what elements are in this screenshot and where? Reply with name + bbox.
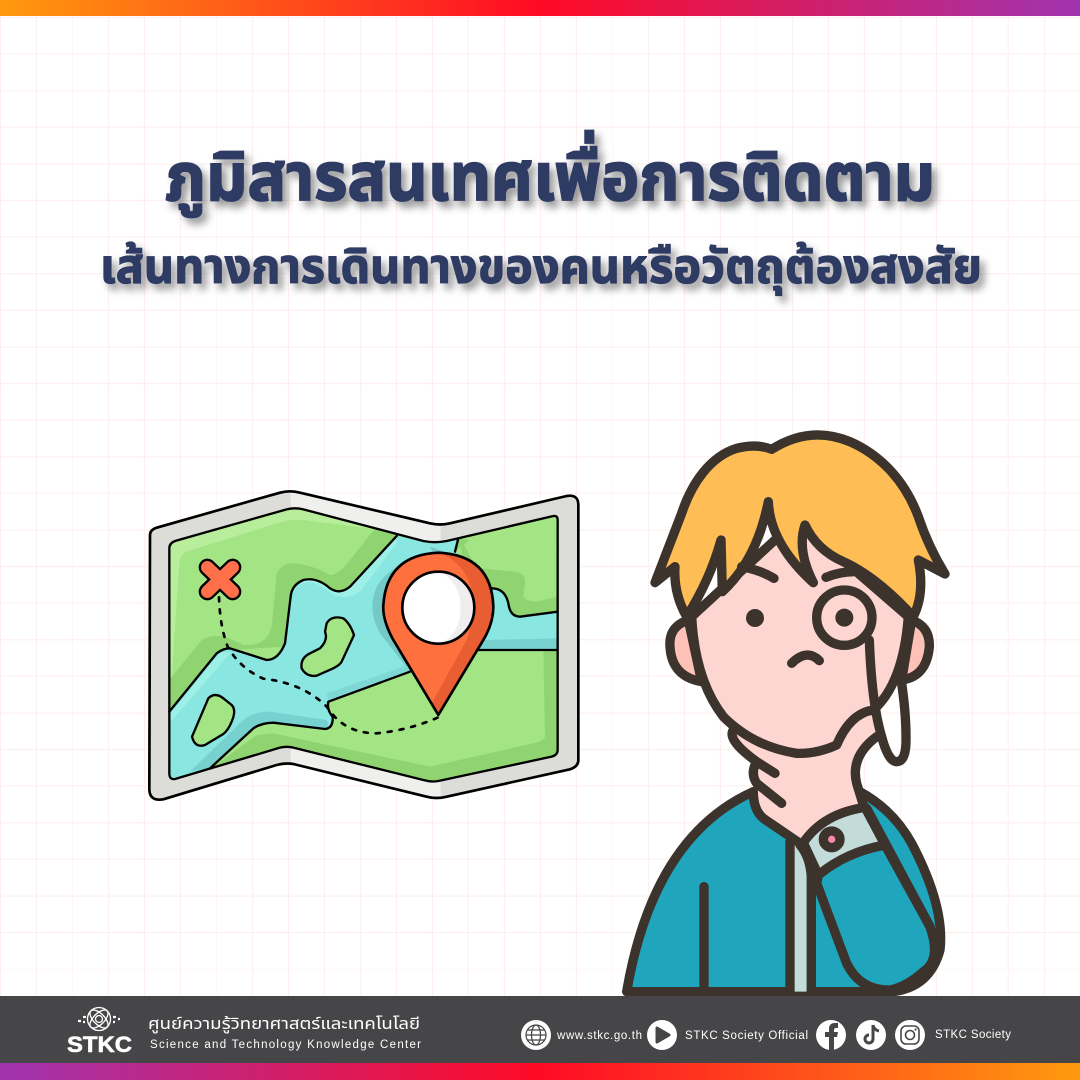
icon: tiktok: [856, 1020, 886, 1050]
bottom gradient bar: [0, 1063, 1080, 1080]
icon: instagram: [895, 1020, 925, 1050]
ears: [670, 620, 929, 682]
person illustration: [627, 435, 945, 992]
mouth: [792, 655, 819, 663]
footer band: [0, 996, 1080, 1063]
website text: www.stkc.go.th: [556, 1030, 642, 1042]
monocle cord: [869, 640, 906, 762]
STKC logo: [67, 1007, 132, 1057]
icon: island upper: [301, 617, 354, 676]
icon: play button: [647, 1020, 677, 1050]
organisation name: [148, 1013, 421, 1051]
society text: STKC Society: [935, 1029, 1011, 1041]
left eye: [746, 609, 764, 627]
eyebrows: [742, 567, 853, 578]
dotted route: [219, 597, 438, 733]
map illustration: [149, 491, 578, 800]
logo emblem: [78, 1007, 120, 1031]
icon: X marker: [207, 567, 233, 592]
body jacket: [627, 792, 941, 992]
title: ภูมิสารสนเทศเพื่อการติดตาม: [165, 130, 935, 231]
icon: facebook: [816, 1020, 846, 1050]
icon: location pin: [383, 553, 493, 715]
organisation name: Science and Technology Knowledge Center: [150, 1039, 421, 1051]
face: [692, 520, 908, 753]
youtube text: STKC Society Official: [685, 1030, 808, 1042]
icon: website globe: [521, 1020, 551, 1050]
title: เส้นทางการเดินทางของคนหรือวัตถุต้องสงสัย: [100, 232, 982, 305]
top gradient bar: [0, 0, 1080, 16]
sleeve and cuff: [803, 807, 935, 990]
title: [100, 130, 982, 305]
monocle: [817, 590, 872, 645]
organisation name: ศูนย์ความรู้วิทยาศาสตร์และเทคโนโลยี: [148, 1013, 420, 1037]
neck: [732, 710, 877, 843]
icon: island lower: [192, 695, 234, 746]
STKC logo: STKC: [67, 1032, 132, 1057]
hair: [655, 435, 945, 617]
